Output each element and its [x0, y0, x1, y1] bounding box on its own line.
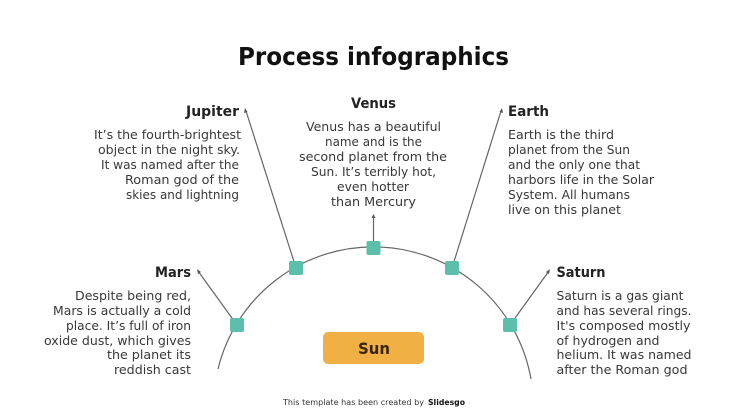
node: Saturn	[503, 318, 517, 332]
text block: Jupiter description: Roman god of the	[125, 173, 239, 187]
text block: Venus description: Venus has a beautiful	[306, 120, 441, 134]
text block: Saturn description: and has several rings.	[556, 304, 692, 318]
text block: Saturn description: helium. It was named	[556, 348, 692, 362]
sun box: Sun	[358, 339, 390, 358]
arrow: Jupiter	[244, 108, 296, 268]
text block: Venus description: name and is the	[325, 135, 422, 149]
heading: Jupiter: Jupiter	[185, 104, 239, 120]
text block: Mars description	[44, 289, 191, 377]
panel: Earth	[508, 104, 654, 217]
text block: Jupiter description: It was named after the	[101, 158, 239, 172]
text block: Saturn description: of hydrogen and	[556, 334, 660, 348]
text block: Earth description: Earth is the third	[508, 128, 614, 142]
process arc	[218, 247, 531, 379]
panel: Jupiter	[94, 104, 241, 202]
heading: Earth: Earth	[508, 104, 549, 120]
text block: Venus description	[299, 120, 447, 209]
text block: Mars description: Mars is actually a cold	[53, 304, 191, 318]
panel: Saturn	[556, 265, 692, 377]
text block: Mars description: Despite being red,	[75, 289, 191, 303]
text block: Jupiter description: object in the night sky.	[98, 143, 240, 157]
footer credit: Slidesgo	[428, 398, 465, 407]
arrow: Mars	[197, 269, 237, 325]
arrow: Venus	[372, 214, 376, 248]
node: Mars	[230, 318, 244, 332]
text block: Jupiter description: skies and lightning	[126, 188, 239, 202]
text block: Earth description: harbors life in the Solar	[508, 173, 654, 187]
footer credit: This template has been created by	[282, 398, 424, 407]
text block: Mars description: place. It’s full of iron	[66, 319, 191, 333]
text block: Venus description: than Mercury	[331, 195, 416, 209]
arrow: Earth	[452, 108, 503, 268]
sun box	[323, 332, 424, 364]
text block: Venus description: even hotter	[337, 180, 409, 194]
text block: Jupiter description	[94, 128, 241, 202]
text block: Venus description: second planet from the	[299, 150, 447, 164]
heading: Mars: Mars	[155, 265, 191, 281]
text block: Saturn description: Saturn is a gas giant	[556, 289, 684, 303]
text block: Saturn description	[556, 289, 692, 377]
text block: Saturn description: after the Roman god	[556, 363, 688, 377]
text block: Mars description: reddish cast	[114, 363, 191, 377]
node: Earth	[445, 261, 459, 275]
node: Venus	[366, 241, 380, 255]
text block: Earth description: System. All humans	[508, 188, 630, 202]
arrow: Saturn	[510, 269, 550, 325]
text block: Mars description: oxide dust, which gives	[44, 334, 191, 348]
text block: Earth description: live on this planet	[508, 203, 621, 217]
text block: Venus description: Sun. It’s terribly hot,	[311, 165, 436, 179]
text block: Earth description: planet from the Sun	[508, 143, 630, 157]
panel: Venus	[299, 96, 447, 209]
text block: Jupiter description: It’s the fourth-brightest	[94, 128, 241, 142]
title: Process infographics	[238, 42, 509, 71]
text block: Earth description	[508, 128, 654, 217]
heading: Venus: Venus	[351, 96, 396, 112]
heading: Saturn: Saturn	[556, 265, 606, 281]
text block: Saturn description: It's composed mostly	[556, 319, 690, 333]
node: Jupiter	[289, 261, 303, 275]
panel: Mars	[44, 265, 191, 377]
text block: Earth description: and the only one that	[508, 158, 640, 172]
text block: Mars description: the planet its	[107, 348, 191, 362]
